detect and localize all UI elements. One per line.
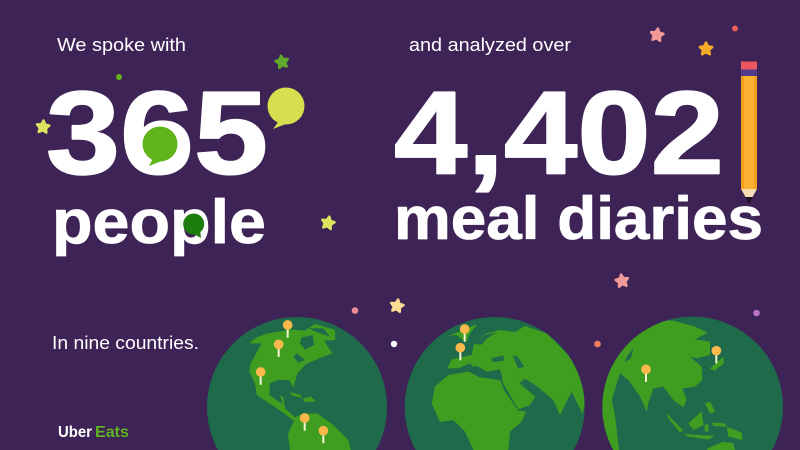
sea: Hudson Bay and inlets [293, 328, 330, 363]
big number: 4,402: 4,402 [394, 68, 724, 200]
text: in nine countries: In nine countries. [52, 332, 199, 353]
decorative stars and dots [36, 26, 760, 347]
logo: Uber Eats: Uber [58, 424, 92, 441]
globe: Europe and Africa [405, 317, 587, 450]
pins: Asia [641, 346, 721, 382]
logo: Uber Eats [58, 424, 129, 441]
icon: dark green speech bubble [183, 214, 204, 238]
sea: Black, Caspian and Baltic [472, 332, 524, 376]
icon: yellow speech bubble [268, 88, 304, 129]
land: Africa and Eurasia [432, 324, 587, 450]
intro text: and analyzed over: and analyzed over [409, 34, 571, 55]
pins: Europe [455, 324, 469, 360]
icon: pencil [741, 62, 757, 204]
pins: Americas [256, 320, 328, 443]
intro text: we spoke with: We spoke with [57, 34, 186, 55]
globe: Asia and Oceania [595, 317, 783, 450]
logo: Uber Eats: Eats [95, 424, 129, 441]
land: Asia and islands [595, 320, 742, 450]
label: people: people [52, 188, 266, 257]
icon: green speech bubble [142, 126, 178, 166]
big number: 365: 365 [46, 68, 268, 200]
land: North and South America [249, 324, 351, 450]
sea: Caspian [625, 348, 633, 362]
label: meal diaries: meal diaries [394, 185, 763, 252]
globe: Americas [207, 317, 387, 450]
